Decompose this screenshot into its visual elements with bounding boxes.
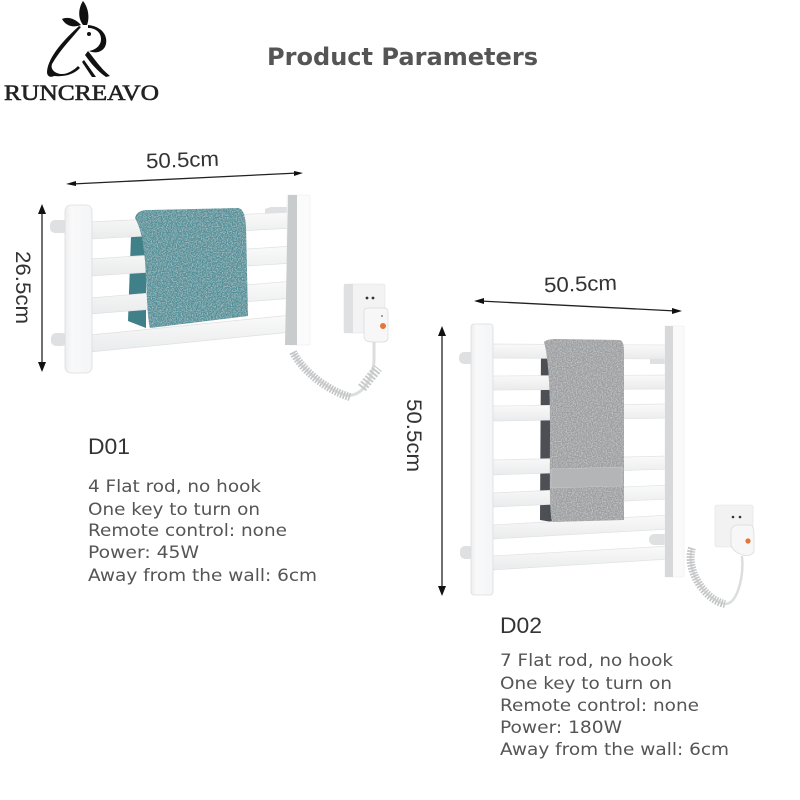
right post [665,326,684,577]
dimension: D01 height: 26.5cm [11,251,34,324]
plug controller [364,308,388,342]
specs: D01: Power: 45W [88,543,199,563]
specs: D02: Away from the wall: 6cm [500,740,729,760]
specs: D01 [88,477,317,586]
four flat rods [90,212,294,314]
specs: D01: One key to turn on [88,500,260,520]
product D02: towel rack with grey towel [459,324,754,604]
logo: Runcreavo rabbit [4,1,159,105]
specs: D01: Remote control: none [88,521,287,541]
back of grey towel [540,348,552,522]
label: D02: D02 [500,613,542,638]
coiled cable [293,342,378,397]
specs: D02: Power: 180W [500,718,622,738]
dimension: D02 width [474,272,682,314]
dimension: D02 height [402,326,446,596]
specs: D02: 7 Flat rod, no hook [500,651,673,671]
dimension: D01 height [11,204,46,372]
grey towel [544,339,624,522]
dimension: D02 height: 50.5cm [402,399,425,472]
dimension: D02 width: 50.5cm [544,272,617,297]
front rod over towel [90,315,292,352]
wall studs [50,207,291,346]
icon: rabbit mark [47,1,110,77]
coiled cable [691,548,742,604]
teal towel [135,208,248,328]
wall socket [344,284,385,333]
left post [471,324,493,595]
title: Product Parameters [267,43,538,71]
specs: D01: Away from the wall: 6cm [88,566,317,586]
logo wordmark: RUNCREAVO [4,80,159,105]
wall socket [715,505,753,547]
towel bottom band [551,467,622,488]
right post [285,195,310,345]
dimension: D01 width [66,148,303,186]
product D01: towel rack with teal towel [50,195,388,397]
seven flat rods [492,344,670,570]
specs: D01: 4 Flat rod, no hook [88,477,261,497]
specs: D02 [500,651,729,760]
left post [65,205,92,373]
label: D01: D01 [88,434,130,459]
dimension: D01 width: 50.5cm [146,148,219,173]
specs: D02: Remote control: none [500,696,699,716]
wall studs [459,352,669,559]
specs: D02: One key to turn on [500,674,672,694]
plug controller [731,525,754,556]
back of teal towel [128,236,146,328]
